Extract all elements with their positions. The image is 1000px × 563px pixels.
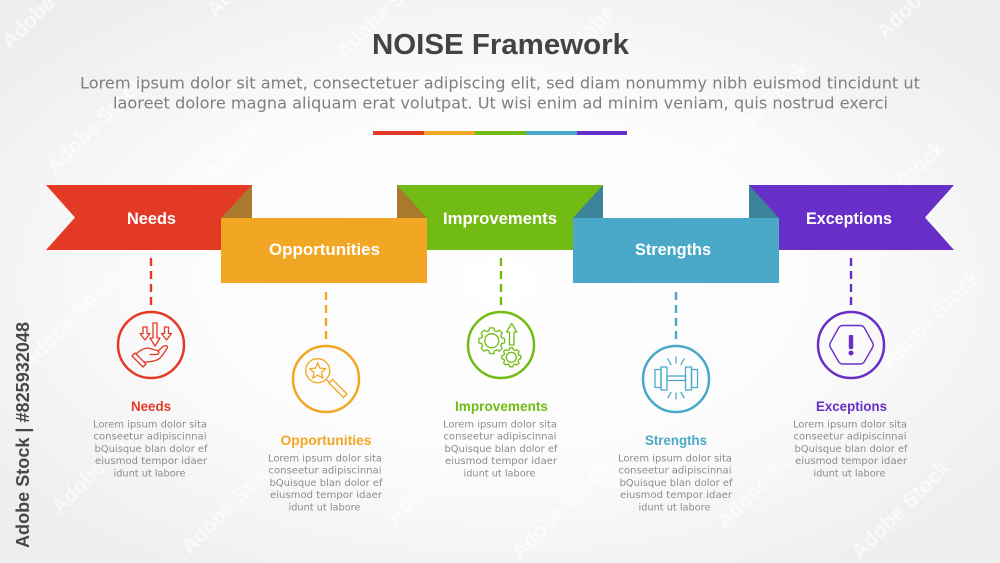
- description: eiusmod tempor idaer: [95, 456, 207, 467]
- icon: gears with up arrow: [468, 312, 534, 378]
- text: Adobe: [557, 1, 620, 64]
- description: Lorem ipsum dolor sita: [268, 454, 382, 464]
- dashed connector: [850, 258, 852, 305]
- column: Opportunities: [268, 292, 383, 514]
- description: [268, 454, 383, 514]
- banner: Strengths: Strengths: [635, 240, 711, 259]
- column: Exceptions: [793, 258, 908, 480]
- description: eiusmod tempor idaer: [620, 490, 732, 501]
- icon: magnifier with star: [293, 346, 359, 412]
- heading: Exceptions: [816, 398, 887, 414]
- text: Adobe Stock: [477, 66, 585, 174]
- title: NOISE Framework: [372, 29, 629, 61]
- dashed connector: [500, 258, 502, 305]
- multicolour title divider: [373, 131, 627, 135]
- banner: Improvements: Improvements: [443, 209, 557, 228]
- banner: Strengths: [573, 218, 779, 283]
- text: Adobe Stock: [842, 136, 950, 244]
- banner: Needs: [46, 185, 252, 250]
- text: Adobe Stock: [877, 266, 985, 374]
- text: Adobe Stock: [42, 71, 150, 179]
- text: Adobe Stock: [507, 456, 615, 563]
- description: conseetur adipiscinnai: [444, 432, 556, 442]
- subtitle text block: [80, 74, 920, 112]
- description: eiusmod tempor idaer: [270, 490, 382, 501]
- text: Adobe Stock: [542, 256, 650, 364]
- banner: Exceptions: Exceptions: [806, 209, 892, 228]
- subtitle text block: laoreet dolore magna aliquam erat volutpat. Ut wisi enim ad minim veniam, quis nostrud exerci: [113, 94, 888, 112]
- column: Strengths: [618, 292, 733, 514]
- banner: Exceptions: [749, 185, 954, 250]
- icon: dumbbell: [643, 346, 709, 412]
- description: idunt ut labore: [814, 468, 886, 480]
- description: bQuisque blan dolor ef: [444, 444, 558, 455]
- text: Adobe Stock: [17, 266, 125, 374]
- description: idunt ut labore: [638, 502, 711, 514]
- text: Adobe Stock: [847, 456, 955, 563]
- ribbon fold: amber to green: [397, 185, 427, 218]
- description: [93, 420, 208, 480]
- dashed connector: [675, 292, 677, 339]
- description: idunt ut labore: [464, 468, 536, 480]
- description: idunt ut labore: [288, 502, 361, 514]
- description: bQuisque blan dolor ef: [620, 478, 733, 489]
- description: conseetur adipiscinnai: [94, 432, 206, 442]
- dashed connector: [325, 292, 327, 339]
- description: conseetur adipiscinnai: [618, 466, 732, 476]
- heading: Opportunities: [280, 432, 372, 448]
- stock image id, vertical: Adobe Stock | #825932048: [13, 322, 33, 548]
- description: Lorem ipsum dolor sita: [793, 420, 907, 430]
- description: Lorem ipsum dolor sita: [93, 420, 207, 430]
- text: Adobe Stock: [202, 76, 310, 184]
- text: Adobe Stock: [47, 411, 155, 519]
- description: [618, 454, 733, 514]
- ribbon fold: green to blue: [573, 185, 603, 218]
- description: eiusmod tempor idaer: [445, 456, 557, 467]
- description: bQuisque blan dolor ef: [794, 444, 908, 455]
- icon: hand receiving arrows: [118, 312, 184, 378]
- icon: hexagon exclamation: [818, 312, 884, 378]
- text: Adobe Stock: [367, 306, 475, 414]
- description: bQuisque blan dolor ef: [270, 478, 383, 489]
- ribbon banner: [46, 185, 954, 283]
- subtitle text block: Lorem ipsum dolor sit amet, consectetuer adipiscing elit, sed diam nonummy nibh euismod tincidunt ut: [80, 74, 920, 92]
- text: Adobe Stock: [712, 426, 820, 534]
- description: [443, 420, 558, 480]
- description: [793, 420, 908, 480]
- ribbon fold: blue to purple: [749, 185, 779, 218]
- heading: Strengths: [645, 432, 707, 448]
- heading: Needs: [131, 398, 171, 414]
- column: Improvements: [443, 258, 558, 480]
- description: Lorem ipsum dolor sita: [618, 454, 732, 464]
- text: Adobe Stock: [707, 56, 815, 164]
- heading: Improvements: [455, 398, 548, 414]
- ribbon fold: red to amber: [221, 185, 252, 218]
- description: bQuisque blan dolor ef: [94, 444, 208, 455]
- banner: Improvements: [397, 185, 603, 250]
- description: Lorem ipsum dolor sita: [443, 420, 557, 430]
- description: eiusmod tempor idaer: [795, 456, 907, 467]
- dashed connector: [150, 258, 152, 305]
- banner: Opportunities: [221, 218, 427, 283]
- banner: Needs: Needs: [127, 209, 176, 228]
- column: Needs: [93, 258, 208, 480]
- description: conseetur adipiscinnai: [268, 466, 382, 476]
- text: Adobe Stock: [177, 451, 285, 559]
- text: Adobe Stock: [212, 246, 320, 354]
- description: idunt ut labore: [114, 468, 186, 480]
- banner: Opportunities: Opportunities: [269, 240, 380, 259]
- text: Adobe Stock: [382, 421, 490, 529]
- description: conseetur adipiscinnai: [794, 432, 906, 442]
